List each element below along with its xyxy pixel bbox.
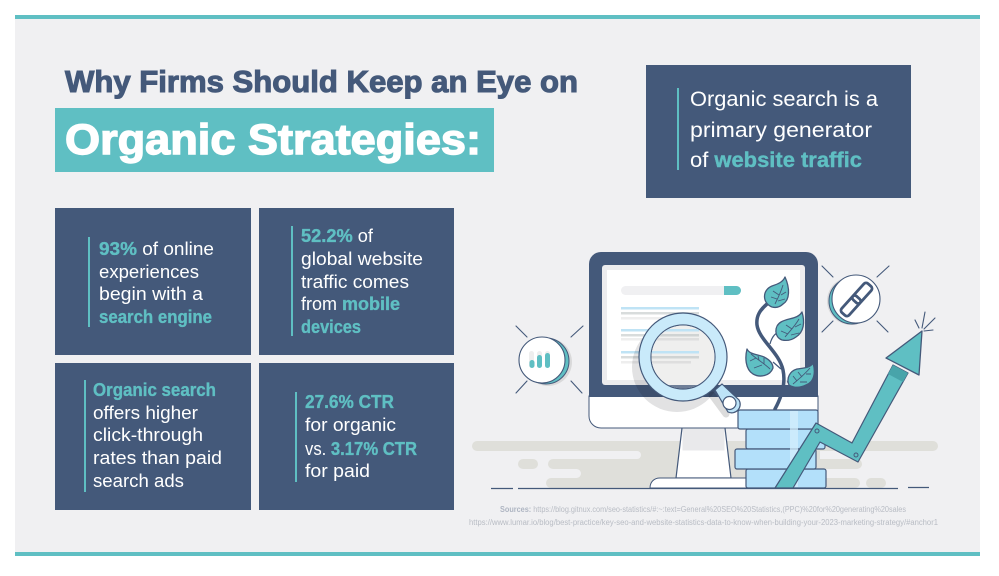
panel: 93 percent search engine: 93% of online	[99, 239, 214, 259]
panel: primary generator callout	[646, 65, 911, 198]
heading banner: organic strategies	[55, 108, 494, 172]
panel: higher click-through rates	[55, 363, 251, 510]
heading: why firms: Why Firms Should Keep an Eye on	[65, 64, 578, 99]
panel: 52.2 percent mobile traffic: 52.2% of	[301, 226, 374, 246]
panel: primary generator callout: primary generator	[690, 118, 872, 142]
panel: 93 percent search engine: experiences	[99, 262, 199, 282]
panel: higher click-through rates: search ads	[93, 471, 184, 491]
panel: 52.2 percent mobile traffic: devices	[301, 317, 361, 337]
panel: 52.2 percent mobile traffic: global website	[301, 249, 423, 269]
panel: higher click-through rates: rates than paid	[93, 448, 222, 468]
panel: higher click-through rates: offers higher	[93, 403, 198, 423]
title	[55, 64, 578, 172]
panel: higher click-through rates: Organic search	[93, 380, 216, 400]
arrow	[775, 312, 935, 488]
panel: 93 percent search engine: begin with a	[99, 284, 204, 304]
block stack	[735, 410, 826, 488]
panel: CTR comparison: vs. 3.17% CTR	[305, 439, 417, 459]
panel: 52.2 percent mobile traffic	[259, 208, 454, 355]
panel: 93 percent search engine: search engine	[99, 307, 212, 327]
baseline	[491, 488, 929, 489]
icon: magnifying glass	[632, 313, 740, 414]
ground shapes	[472, 441, 938, 488]
panel: CTR comparison: for paid	[305, 461, 370, 481]
sources: https://www.lumar.io/blog/best-practice/key-seo-and-website-statistics-data-to-know-when-building-your-2023-marketing-strategy/#anchor1	[469, 518, 939, 527]
panel: 52.2 percent mobile traffic: traffic comes	[301, 272, 409, 292]
panel: CTR comparison	[259, 363, 454, 510]
icon: plant	[746, 277, 814, 409]
sources: Sources: https://blog.gitnux.com/seo-statistics/#:~:text=General%20SEO%20Statistics,(PPC)%20for%20generating%20sales	[500, 505, 906, 514]
icon: chain link badge	[822, 266, 889, 332]
panel: 93 percent search engine	[55, 208, 251, 355]
panel: higher click-through rates: click-through	[93, 425, 203, 445]
panel: primary generator callout: of website traffic	[690, 148, 862, 172]
panel: primary generator callout: Organic search is a	[690, 87, 878, 111]
search bar	[621, 286, 741, 295]
panel: CTR comparison: 27.6% CTR	[305, 392, 394, 412]
lens view	[652, 326, 714, 388]
monitor	[589, 252, 818, 488]
heading banner: organic strategies: Organic Strategies:	[65, 116, 481, 164]
sources	[469, 505, 939, 527]
panel: 52.2 percent mobile traffic: from mobile	[301, 294, 400, 314]
panel: CTR comparison: for organic	[305, 415, 396, 435]
result lines	[621, 307, 699, 364]
icon: bar chart badge	[516, 326, 583, 393]
illustration: SEO monitor scene	[472, 252, 938, 488]
